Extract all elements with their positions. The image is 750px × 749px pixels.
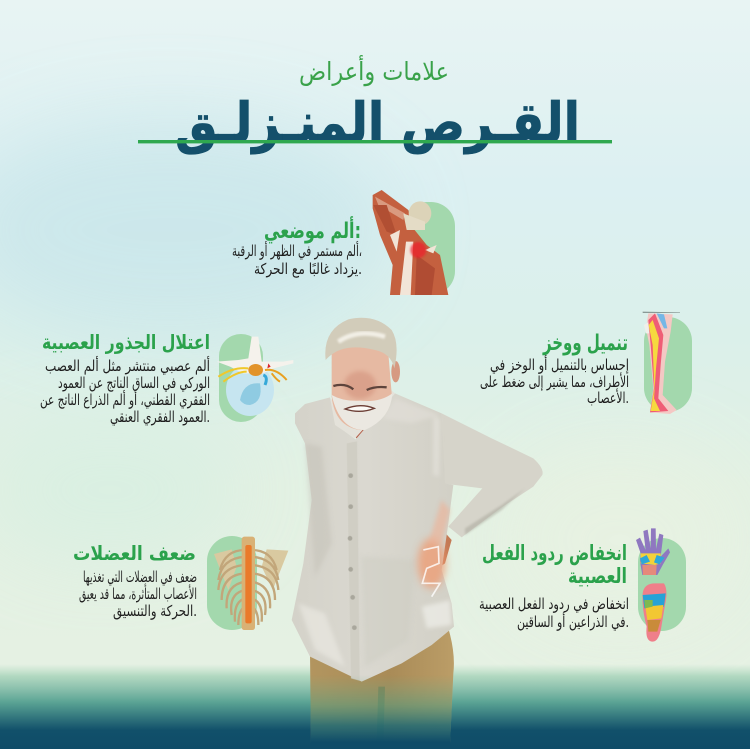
icon: back muscles [373,190,448,295]
face [332,345,392,430]
card: local pain [232,190,448,295]
pain glow on lower back [418,500,450,597]
sleeve [442,413,543,537]
trouser fade into band [310,679,452,744]
description: الأعصاب المتأثرة، مما قد يعيق [79,583,197,603]
icon: leg dermatomes [643,312,680,414]
pill: local pain [403,202,455,295]
hair [325,318,397,368]
description [40,356,210,427]
cuff fold shading [465,488,525,535]
description [232,241,362,278]
description: في الذراعين أو الساقين. [517,612,629,632]
heading: ضعف العضلات [73,541,196,565]
description [79,568,197,620]
heading: انخفاض ردود الفعل [482,541,627,565]
icon: vertebra [217,337,293,416]
card: radiculopathy [40,330,293,427]
card: muscle weakness [73,537,288,630]
icon: ribcage and spine [214,537,288,630]
pill: weakness [207,536,257,630]
description: إحساس بالتنميل أو الوخز في [490,355,629,375]
nose and brow shading [344,371,376,399]
icon: hand reflex map [636,528,670,575]
card: numbness and tingling [480,312,680,414]
hand on back [435,533,452,570]
icon: foot reflex map [642,583,666,642]
description [479,595,629,632]
pill: reflexes [638,538,686,631]
subtitle: علامات وأعراض [299,54,449,87]
beard [332,393,392,430]
description: انخفاض في ردود الفعل العصبية [479,595,629,614]
bottom teal gradient band [0,664,750,749]
heading: العصبية [568,564,627,588]
collar [330,390,395,438]
main title: القـرص المنـزلـق [175,91,580,155]
card: reduced reflexes [479,528,670,642]
trouser leg gap [377,687,385,743]
heading: ألم موضعي: [264,215,361,244]
description: ألم مستمر في الظهر أو الرقبة، [232,241,362,261]
ear [391,361,400,382]
mouth [345,406,374,411]
placket and buttons [347,441,360,681]
shirt shading [298,398,452,667]
description: ضعف في العضلات التي تغذيها [83,568,197,587]
description: الفقري القطني، أو ألم الذراع الناتج عن [40,390,210,410]
description: الأطراف، مما يشير إلى ضغط على [480,372,629,391]
description: يزداد غالبًا مع الحركة. [254,260,362,278]
central figure: man holding lower back [292,318,543,743]
description: ألم عصبي منتشر مثل ألم العصب [45,356,210,376]
description: الأعصاب. [587,388,629,407]
description: الحركة والتنسيق. [113,602,197,620]
description [480,355,629,407]
heading: اعتلال الجذور العصبية [42,330,210,354]
shirt body [292,393,454,682]
description: الوركي في الساق الناتج عن العمود [58,374,210,393]
head [325,318,400,430]
neck [337,407,380,441]
heading [482,541,627,588]
pill: radiculopathy [219,334,263,422]
trousers [310,628,454,743]
heading: تنميل ووخز [542,331,628,356]
brows and eyes [333,385,387,390]
pill: numbness [644,317,692,412]
description: العمود الفقري العنقي. [110,408,210,427]
